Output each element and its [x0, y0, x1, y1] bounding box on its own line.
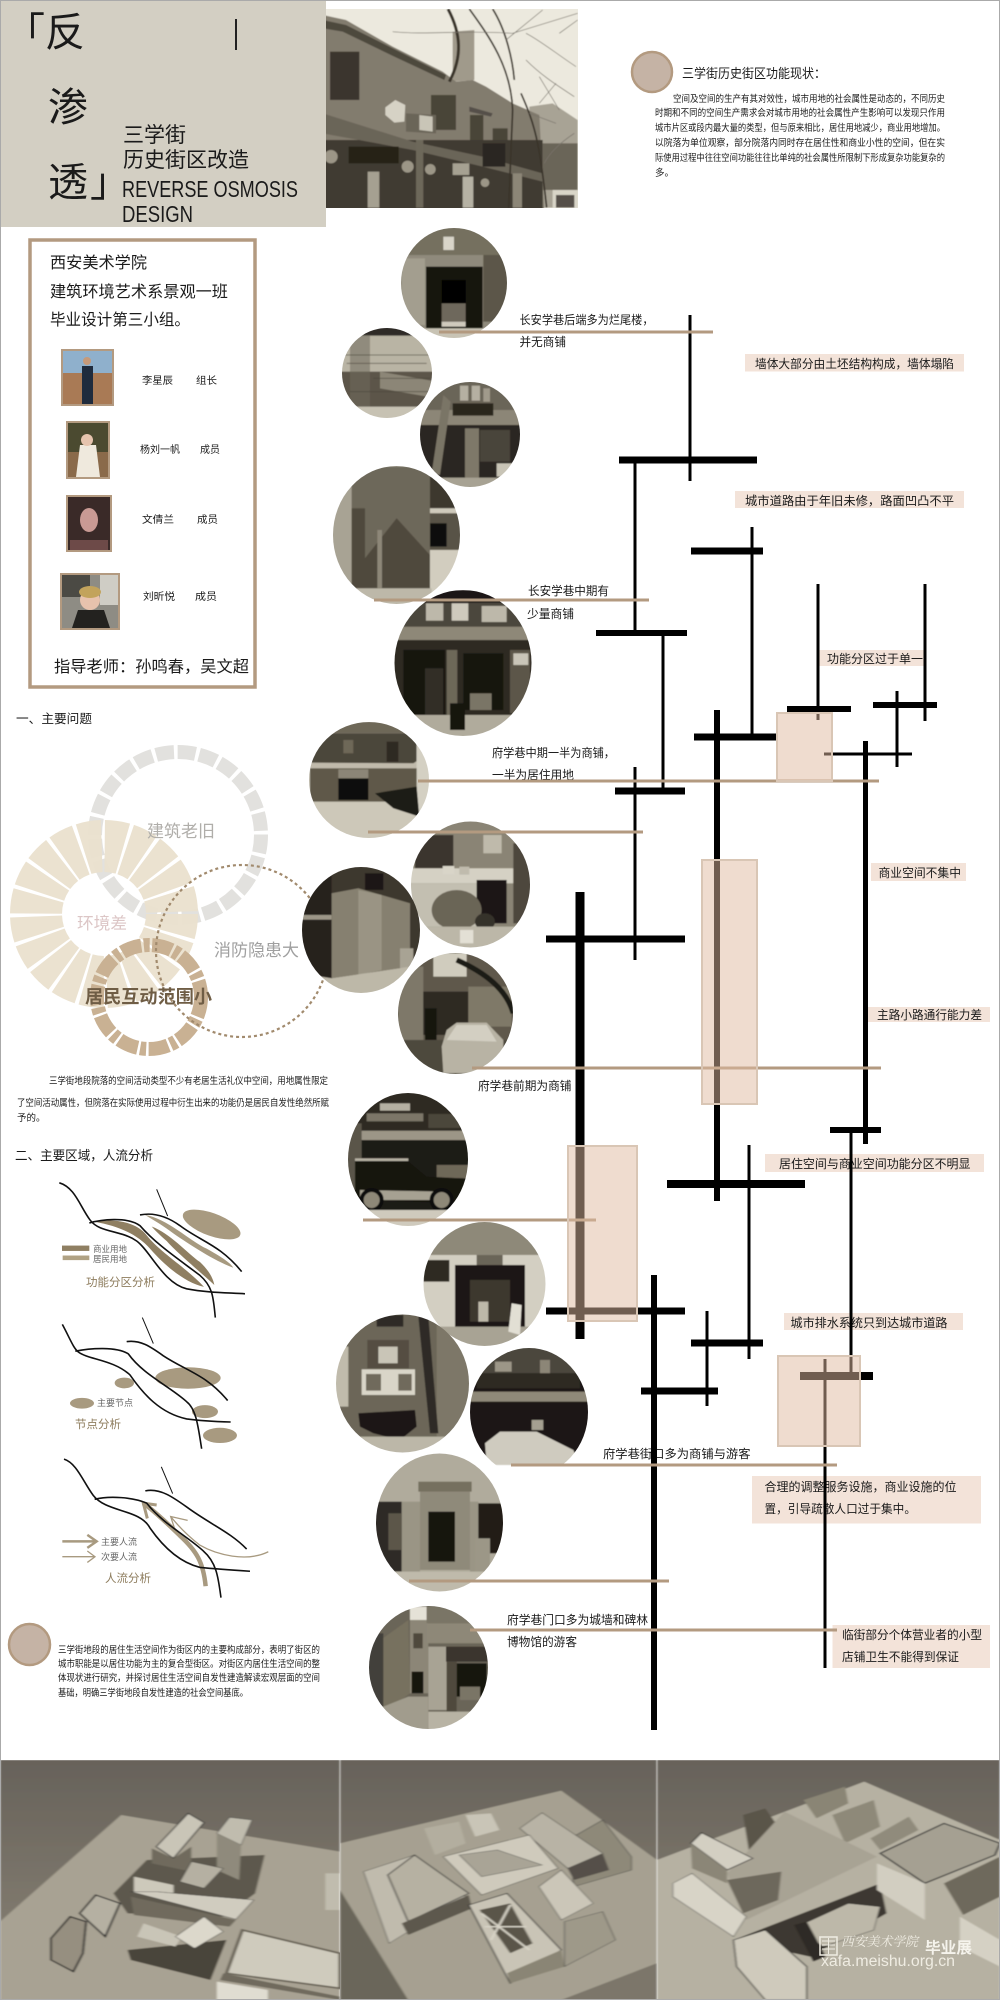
callout: 主路小路: 主路小路通行能力差	[877, 1007, 982, 1022]
text: 府学巷中期: 一半为居住用地	[492, 768, 574, 782]
text: 指导老师: 指导老师：孙鸣春，吴文超	[54, 658, 249, 676]
street labels	[478, 312, 750, 1649]
panel: team	[30, 240, 255, 687]
ring: 环境差	[36, 846, 172, 982]
text: 毕业展: 毕业展	[925, 1939, 972, 1957]
label: 居民互动范围小: 居民互动范围小	[85, 987, 212, 1007]
text: 功能现状: 以院落为单位观察，部分院落内同时存在居住性和商业小性的空间，但在实	[655, 137, 945, 149]
ring: 建筑老旧	[95, 752, 261, 918]
heading: 主要问题: 一、主要问题	[16, 712, 92, 726]
photo: brick gate	[424, 1222, 546, 1346]
diagram: 功能分区分析: 居民用地	[93, 1254, 128, 1264]
ring: 消防隐患大	[156, 865, 328, 1037]
label: 消防隐患大: 消防隐患大	[214, 941, 299, 960]
text: 功能现状: 城市片区或段内最大量的类型，但与原来相比，居住用地减少，商业用地增加。	[655, 122, 945, 134]
photo: SUV shop	[347, 1092, 470, 1228]
label: 环境差: 环境差	[77, 914, 127, 933]
text: school: 毕业设计第三小组。	[50, 311, 190, 329]
text: 府学巷中期: 府学巷中期一半为商铺，	[492, 745, 615, 760]
subtitle: 历史街区改造	[123, 149, 249, 172]
callout: 居住空间: 居住空间与商业空间功能分区不明显	[779, 1156, 970, 1171]
text: 文倩兰: 成员	[197, 514, 218, 526]
avatar: 李星辰	[62, 350, 113, 405]
heading: 功能现状: 三学街历史街区功能现状：	[682, 66, 826, 81]
chart: problem circles	[36, 752, 328, 1049]
text: 李星辰	[142, 374, 217, 387]
leader lines	[363, 330, 881, 1632]
callout: 商业空间	[871, 863, 966, 881]
text: 功能现状: 多。	[655, 167, 674, 179]
photo: courtyard with bikes	[307, 720, 430, 840]
text: 问题说明: 予的。	[17, 1112, 46, 1124]
text: 文倩兰: 文倩兰	[142, 513, 174, 526]
text: 刘昕悦: 成员	[195, 591, 217, 603]
callout: 居住空间	[765, 1154, 984, 1172]
callout: 店铺卫生: 临街部分个体营业者的小型	[842, 1627, 982, 1642]
diagram: 节点分析: 节点分析	[75, 1417, 121, 1431]
photo: doorway	[401, 228, 507, 338]
callout: 商业空间: 商业空间不集中	[878, 865, 961, 880]
subtitle: REVERSE OSMOSIS	[122, 176, 298, 202]
text: school: 建筑环境艺术系景观一班	[50, 282, 228, 301]
heading: 反渗透: 透	[48, 161, 88, 205]
text: 文倩兰	[142, 513, 218, 526]
section: 功能现状	[632, 52, 945, 179]
text: 府学巷中期	[492, 745, 615, 782]
text: 府学巷门口	[507, 1612, 648, 1649]
text: 李星辰: 组长	[196, 374, 217, 387]
text: 功能现状: 时期和不同的空间生产需求会对城市用地的社会属性产生影响可以发现只作用	[655, 107, 945, 119]
text: school	[50, 254, 228, 329]
text: 长安学巷后端	[520, 312, 654, 349]
icon: circle	[632, 52, 672, 92]
diagram: 功能分区分析: 功能分区分析	[86, 1275, 155, 1289]
text: 问题说明: 了空间活动属性，但院落在实际使用过程中衍生出来的功能仍是居民自发性绝然所赋	[17, 1097, 329, 1109]
photo: mural wall	[333, 1312, 473, 1455]
photo: model 3	[657, 1760, 1000, 2000]
callout: 功能分区: 功能分区过于单一	[827, 652, 923, 666]
heading: 反渗透	[5, 11, 237, 205]
avatar: 文倩兰	[67, 496, 111, 551]
text: 功能现状: 际使用过程中往往空间功能往往比单纯的社会属性所限制下形成复杂功能复杂的	[655, 152, 945, 164]
photo: stone gate	[373, 1452, 507, 1595]
text: 长安学巷中期: 长安学巷中期有	[528, 583, 609, 598]
callouts: problems	[735, 354, 990, 1668]
watermark	[820, 1934, 972, 1970]
text: url: xafa.meishu.org.cn	[821, 1953, 955, 1970]
diagram: 人流分析: 次要人流	[101, 1551, 137, 1562]
photo: car in alley	[398, 953, 513, 1074]
subtitle: 三学街	[123, 124, 186, 147]
text: 杨刘一帆: 杨刘一帆	[140, 443, 180, 456]
text: 居住生活空间: 城市职能是以居住功能为主的复合型街区。对街区内居住生活空间的整	[58, 1658, 320, 1670]
text: 府学巷前期: 府学巷前期为商铺	[478, 1078, 572, 1093]
photo: flowers and door	[410, 820, 533, 950]
diagram: 人流分析	[62, 1459, 268, 1598]
callout: 排水: 城市排水系统只到达城市道路	[790, 1315, 948, 1330]
photo: old shopfront	[393, 590, 533, 737]
text: 杨刘一帆: 成员	[200, 444, 220, 456]
photo: model 2	[340, 1760, 657, 2000]
text: 功能现状: 空间及空间的生产有其对效性，城市用地的社会属性是动态的，不同历史	[673, 93, 945, 105]
text: school: 西安美术学院	[50, 254, 147, 272]
text: 长安学巷后端: 并无商铺	[520, 334, 566, 349]
text: 李星辰: 李星辰	[142, 374, 173, 387]
text: 府学巷门口: 博物馆的游客	[507, 1634, 577, 1649]
text: 问题说明	[17, 1075, 329, 1124]
photo: alley shop	[367, 1603, 490, 1732]
callout: 墙体: 墙体大部分由土坯结构构成，墙体塌陷	[755, 356, 954, 371]
text: 府学巷街口: 府学巷街口多为商铺与游客	[603, 1446, 750, 1461]
diagram: 功能分区分析: 商业用地	[93, 1244, 128, 1254]
text: 杨刘一帆	[140, 443, 220, 456]
diagram: 功能分区分析	[59, 1183, 245, 1318]
section: 居住生活空间	[9, 1624, 320, 1699]
text: 居住生活空间: 体现状进行研究，并探讨居住生活空间自发性建造解读宏观层面的空间	[58, 1672, 320, 1684]
photo: shop with tree	[420, 382, 520, 487]
avatar: 刘昕悦	[61, 574, 119, 629]
text: 长安学巷中期: 少量商铺	[527, 606, 574, 621]
highlight boxes	[568, 713, 860, 1446]
callout: 店铺卫生: 店铺卫生不能得到保证	[842, 1649, 959, 1664]
heading: 反渗透: 渗	[48, 86, 88, 130]
text: 刘昕悦: 刘昕悦	[143, 590, 175, 603]
icon: circle	[9, 1624, 50, 1665]
text: 刘昕悦	[143, 590, 217, 603]
text: 长安学巷中期	[527, 583, 609, 621]
title block	[0, 0, 326, 227]
text: 居住生活空间: 基础，明确三学街地段自发性建造的社会空间基底。	[58, 1687, 248, 1699]
label: 建筑老旧: 建筑老旧	[147, 822, 215, 841]
text: 长安学巷后端: 长安学巷后端多为烂尾楼，	[520, 312, 654, 327]
diagram: 节点分析	[62, 1318, 237, 1449]
photo: street view	[323, 6, 581, 211]
subtitle	[122, 124, 298, 227]
ring: 居民互动范围小	[97, 945, 201, 1049]
photo: earth wall	[342, 328, 432, 418]
subtitle: DESIGN	[122, 201, 193, 227]
text: 功能现状	[655, 93, 945, 179]
callout: 调整服务设施: 置，引导疏散人口过于集中。	[764, 1501, 916, 1516]
text: 府学巷门口: 府学巷门口多为城墙和碑林	[507, 1612, 648, 1627]
diagram: 人流分析: 人流分析	[105, 1571, 151, 1585]
avatar: 杨刘一帆	[67, 422, 109, 478]
photo: model 1	[0, 1760, 340, 2000]
timeline: black bars	[546, 315, 937, 1730]
diagram: 节点分析: 主要节点	[97, 1397, 133, 1408]
callout: 道路: 城市道路由于年旧未修，路面凹凸不平	[745, 493, 954, 508]
photo: corner wall	[300, 865, 423, 995]
text: 问题说明: 三学街地段院落的空间活动类型不少有老居生活礼仪中空间，用地属性限定	[49, 1075, 328, 1087]
heading: 反渗透: 」	[90, 161, 130, 205]
photo: covered car shop	[467, 1347, 590, 1465]
text: 居住生活空间: 三学街地段的居住生活空间作为街区内的主要构成部分，表明了街区的	[58, 1644, 320, 1656]
callout: 店铺卫生	[832, 1625, 990, 1668]
text: 居住生活空间	[58, 1644, 320, 1699]
callout: 调整服务设施: 合理的调整服务设施，商业设施的位	[764, 1479, 956, 1494]
heading: 主要区域: 二、主要区域，人流分析	[15, 1148, 153, 1163]
callout: 调整服务设施	[752, 1476, 981, 1524]
text: school name: 西安美术学院	[841, 1934, 920, 1949]
icon: logo	[820, 1937, 837, 1955]
photo: tall wall	[330, 463, 463, 607]
heading: 反渗透: 「反	[5, 11, 85, 55]
diagram: 人流分析: 主要人流	[101, 1536, 137, 1547]
